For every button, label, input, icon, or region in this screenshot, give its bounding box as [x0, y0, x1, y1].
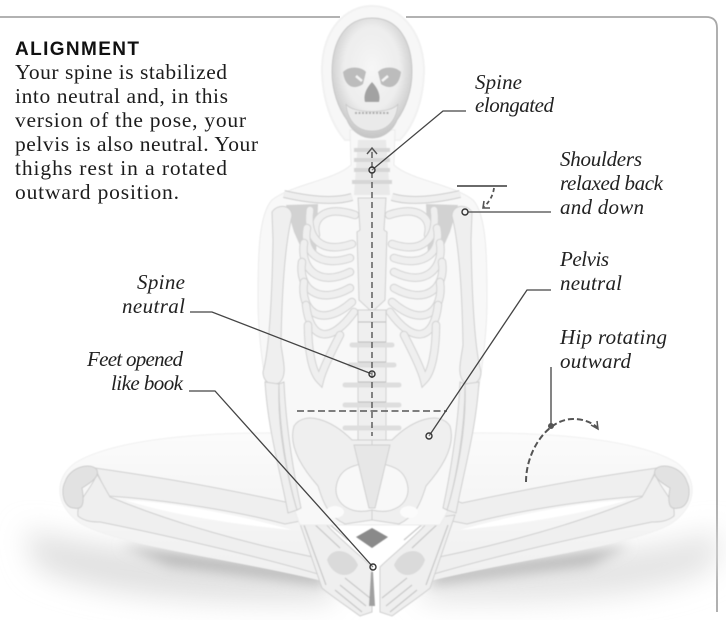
label: shoulders relaxed: and down: [560, 195, 644, 219]
label: shoulders relaxed: relaxed back: [560, 171, 664, 195]
legs: right leg: [380, 433, 692, 616]
leader: feet: [189, 391, 376, 570]
humerus: [263, 206, 292, 384]
label: spine neutral: neutral: [122, 294, 185, 318]
label: pelvis neutral: [559, 247, 622, 295]
ribs: [301, 210, 355, 380]
label: spine elongated: elongated: [475, 93, 554, 117]
label: spine elongated: Spine: [475, 70, 522, 94]
soft tissue: leg: [60, 433, 335, 580]
heading: ALIGNMENT: [15, 39, 139, 60]
label: spine neutral: Spine: [137, 270, 185, 294]
lumbar spine: [345, 310, 399, 440]
label: feet opened: Feet opened: [86, 347, 184, 371]
leader: spine neutral: [190, 312, 375, 377]
alignment description: Your spine is stabilized: [15, 60, 227, 84]
leader: hip: [548, 367, 554, 429]
pelvis half: [293, 418, 372, 524]
hip rotation dashed arrow: [526, 419, 598, 482]
alignment description: [15, 60, 258, 204]
cervical spine: [354, 140, 390, 195]
skeleton: left half: [263, 194, 372, 524]
legs: left leg (mirrored to the right): [60, 433, 372, 616]
label: feet opened: like book: [111, 371, 184, 395]
label: feet opened: [86, 347, 184, 395]
horizontal dashed pelvis line: [297, 410, 447, 412]
obturator foramen: [326, 506, 344, 518]
alignment description: pelvis is also neutral. Your: [15, 132, 258, 156]
tibia: [78, 474, 328, 574]
leader: spine elongated: [369, 111, 466, 173]
foot: [297, 515, 372, 616]
label: hip rotating: outward: [560, 349, 632, 373]
label: spine neutral: [122, 270, 185, 318]
shoulder reference bar and arrow: [457, 186, 507, 208]
scapula: [286, 204, 318, 258]
label: shoulders relaxed: [560, 147, 664, 219]
label: spine elongated: [475, 70, 554, 117]
soft tissue: hair: [322, 6, 424, 140]
sternum: [357, 198, 387, 312]
gap between femur and tibia: [125, 500, 292, 530]
alignment description: outward position.: [15, 180, 179, 204]
label: hip rotating: Hip rotating: [559, 325, 667, 349]
vertical dashed spine axis with arrow: [367, 148, 377, 436]
label: pelvis neutral: Pelvis: [559, 247, 609, 271]
label: pelvis neutral: neutral: [560, 271, 622, 295]
alignment description: version of the pose, your: [15, 108, 246, 132]
label: shoulders relaxed: Shoulders: [560, 147, 642, 171]
alignment description: thighs rest in a rotated: [15, 156, 227, 180]
sacrum: [354, 445, 390, 508]
knee: [63, 466, 97, 508]
soft tissue: torso and arms: [258, 130, 487, 525]
floor shadow: [25, 530, 720, 601]
femur: [95, 468, 326, 524]
leader: pelvis: [426, 290, 551, 439]
leader: shoulders: [462, 209, 551, 215]
gap between feet: [356, 528, 388, 548]
skeleton: right half: [372, 194, 481, 524]
alignment description: into neutral and, in this: [15, 84, 228, 108]
label: hip rotating: [559, 325, 667, 373]
clavicle: [284, 194, 352, 200]
forearm: [265, 382, 297, 513]
skull: [332, 18, 412, 138]
